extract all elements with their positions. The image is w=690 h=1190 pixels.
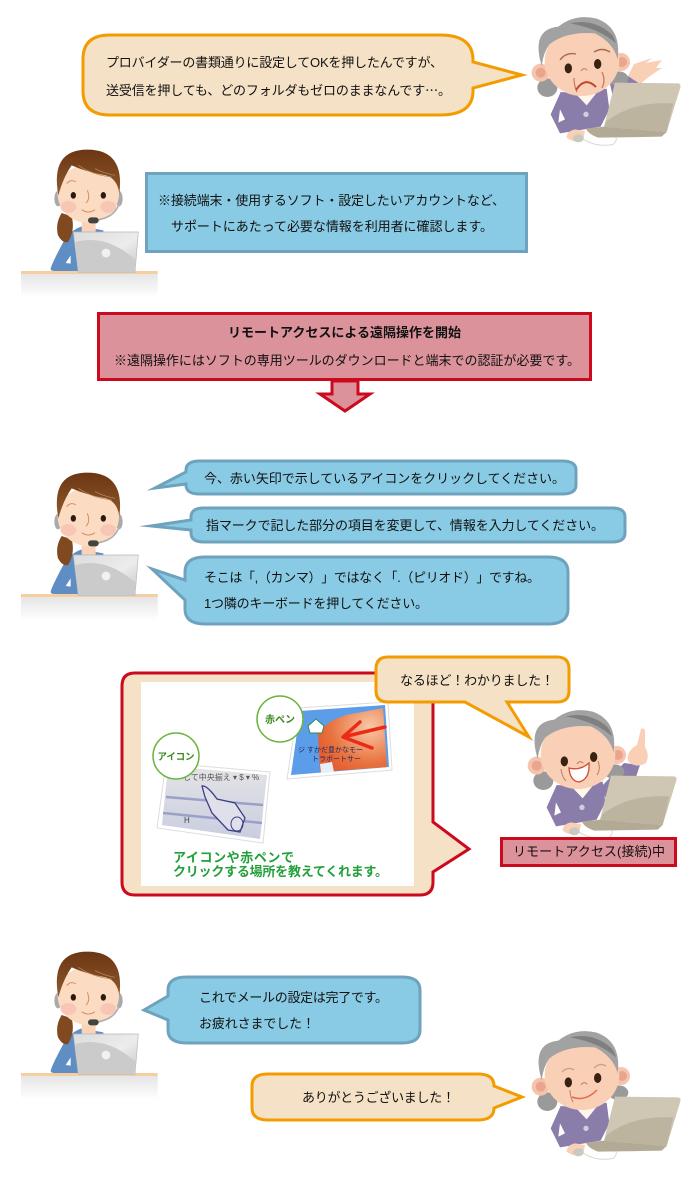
speech bubble: click the red arrow icon	[155, 461, 576, 494]
caption: tools show where to click: クリックする場所を教えてくれます。	[173, 864, 388, 879]
screenshot: red pen arrow: ジ すかだ豊かなモー	[298, 745, 363, 754]
badge: red pen: 赤ペン	[265, 714, 295, 726]
icon: smiling grandmother pointing	[528, 710, 677, 838]
panel: remote access start: リモートアクセスによる遠隔操作を開始	[228, 325, 461, 340]
speech bubble: settings complete	[144, 977, 420, 1043]
speech bubble: click the red arrow icon: 今、赤い矢印で示しているアイコンをクリックしてください。	[204, 471, 565, 486]
screenshot: red pen arrow	[287, 702, 392, 779]
panel: agent confirms information: ※接続端末・使用するソフト・設定したいアカウントなど、	[158, 193, 505, 208]
icon: support agent with headset 1	[21, 150, 158, 298]
screenshot: red pen arrow: トラボートサー	[312, 755, 361, 763]
caption: tools show where to click: アイコンや赤ペンで	[173, 850, 294, 865]
panel: agent confirms information	[146, 174, 526, 252]
speech bubble: understood	[376, 657, 569, 737]
label: remote access connected: リモートアクセス(接続)中	[513, 844, 665, 859]
panel: remote access start: ※遠隔操作にはソフトの専用ツールのダウンロードと端末での認証が必要です。	[114, 353, 580, 368]
speech bubble: comma versus period: 1つ隣のキーボードを押してください。	[204, 596, 428, 611]
panel: remote screen with icon and red pen	[122, 673, 469, 895]
speech bubble: settings complete: これでメールの設定は完了です。	[199, 990, 388, 1005]
icon: happy grandmother at laptop	[532, 1031, 681, 1159]
label: remote access connected	[502, 838, 676, 866]
screenshot: toolbar with pointing hand	[157, 763, 270, 843]
speech bubble: settings complete: お疲れさまでした！	[199, 1016, 315, 1031]
speech bubble: change marked fields	[151, 508, 625, 542]
speech bubble: provider settings question	[83, 35, 522, 115]
icon: support agent with headset 2	[21, 473, 158, 621]
speech bubble: provider settings question: 送受信を押しても、どのフォルダもゼロのままなんです…。	[106, 80, 451, 99]
badge: red pen	[257, 696, 303, 742]
badge: icon: アイコン	[158, 752, 194, 763]
screenshot: toolbar with pointing hand: H	[184, 816, 190, 825]
speech bubble: understood: なるほど！わかりました！	[400, 673, 554, 688]
speech bubble: comma versus period	[152, 557, 568, 624]
panel: remote access start	[98, 314, 590, 380]
icon: worried grandmother at laptop	[532, 17, 681, 145]
speech bubble: comma versus period: そこは「,（カンマ）」ではなく「.（ピリオド）」ですね。	[204, 570, 540, 585]
arrow: proceed down	[320, 381, 370, 411]
caption: tools show where to click	[173, 850, 388, 879]
badge: icon	[153, 733, 199, 779]
speech bubble: change marked fields: 指マークで記した部分の項目を変更して、情報を入力してください。	[206, 518, 604, 533]
screenshot: toolbar with pointing hand: して中央揃え ▾ $ ▾ %	[183, 772, 259, 782]
speech bubble: thank you: ありがとうございました！	[302, 1090, 455, 1105]
icon: support agent with headset 3	[21, 952, 158, 1100]
speech bubble: thank you	[252, 1074, 522, 1120]
panel: agent confirms information: サポートにあたって必要な情報を利用者に確認します。	[171, 219, 493, 234]
speech bubble: provider settings question: プロバイダーの書類通りに設定してOKを押したんですが、	[106, 55, 443, 70]
